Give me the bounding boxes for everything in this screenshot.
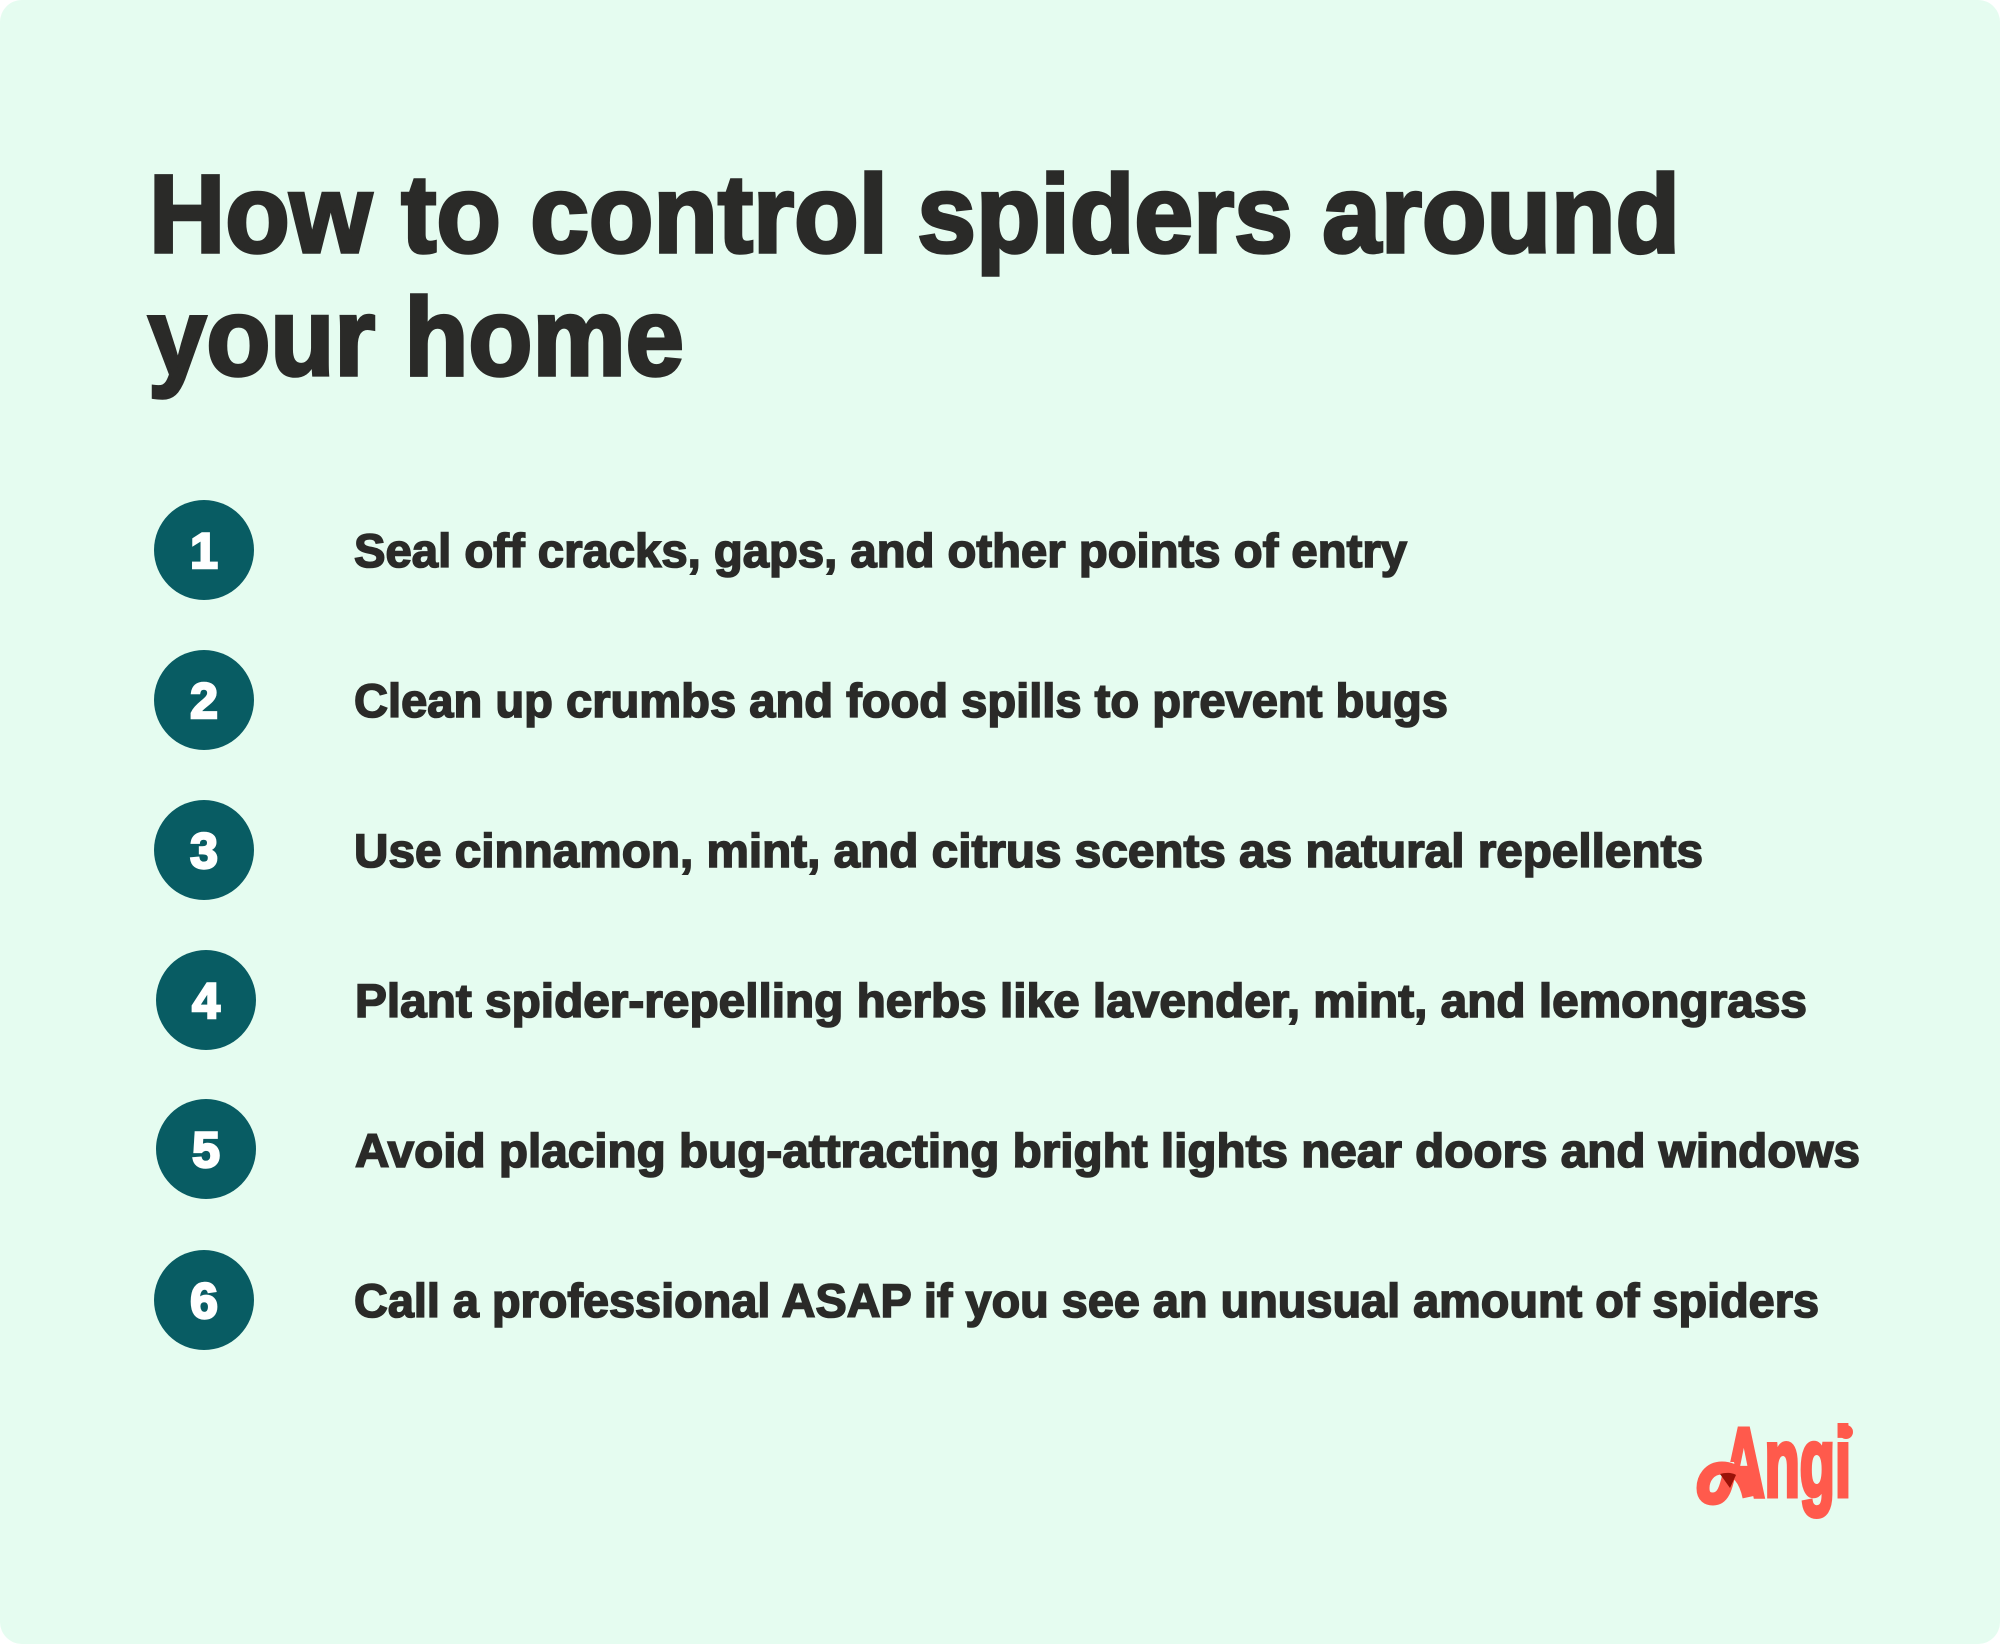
step 1 xyxy=(154,500,1407,600)
step 3: 3 xyxy=(190,823,218,879)
step 3 xyxy=(154,800,1703,900)
step 6: Call a professional ASAP if you see an unusual amount of spiders xyxy=(354,1274,1819,1327)
step 4 xyxy=(156,950,1807,1050)
step 2 xyxy=(154,650,1448,750)
step 6 xyxy=(154,1250,1819,1350)
step 2: Clean up crumbs and food spills to prevent bugs xyxy=(354,674,1448,727)
Angi logo: Angi xyxy=(1723,1408,1851,1517)
step 5 xyxy=(156,1099,1860,1199)
step 4: Plant spider-repelling herbs like lavender, mint, and lemongrass xyxy=(355,974,1807,1027)
step 1: 1 xyxy=(190,523,218,579)
step 5: Avoid placing bug-attracting bright lights near doors and windows xyxy=(355,1124,1860,1177)
title: your home xyxy=(148,276,684,399)
step 6: 6 xyxy=(190,1273,218,1329)
step 3: Use cinnamon, mint, and citrus scents as natural repellents xyxy=(354,824,1703,877)
title xyxy=(148,153,1680,399)
step 1: Seal off cracks, gaps, and other points of entry xyxy=(354,524,1407,577)
Angi logo xyxy=(1703,1408,1853,1517)
title: How to control spiders around xyxy=(149,153,1680,276)
step 5: 5 xyxy=(192,1122,220,1178)
step 2: 2 xyxy=(190,673,218,729)
step 4: 4 xyxy=(192,973,220,1029)
